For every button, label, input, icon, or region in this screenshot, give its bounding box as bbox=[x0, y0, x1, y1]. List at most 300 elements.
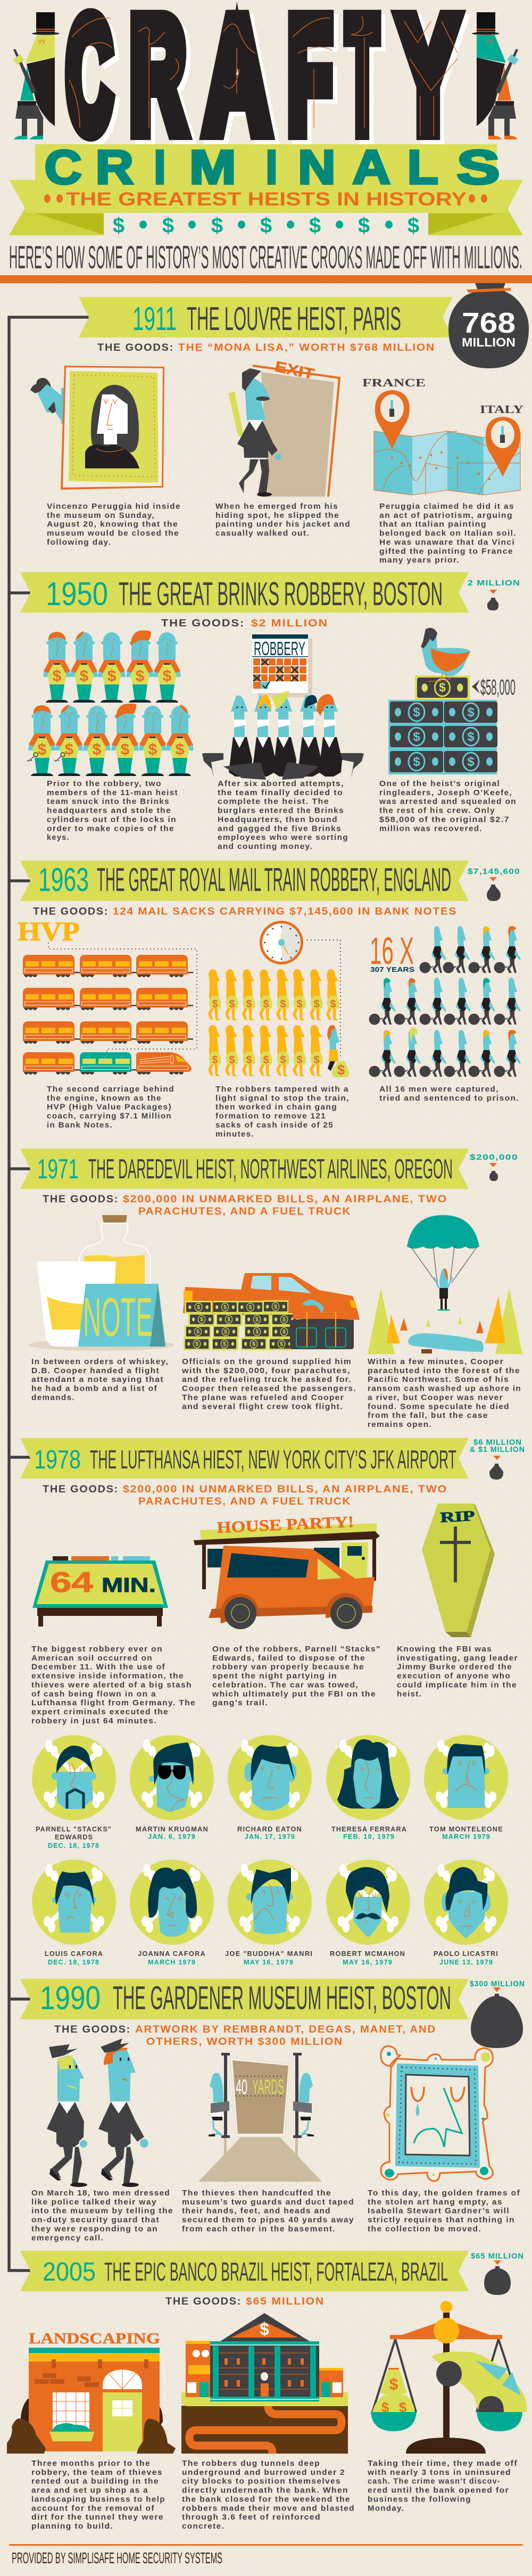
figures: chain gang: $ bbox=[337, 1062, 345, 1078]
portrait: Krugman: MARTIN KRUGMAN bbox=[136, 1825, 209, 1833]
ribbon heading bbox=[20, 572, 469, 613]
portrait: Manri: JOE "BUDDHA" MANRI bbox=[225, 1950, 313, 1958]
text block: col 3: execution of anyone who bbox=[397, 1672, 511, 1681]
text block: col 2: from each other in the basement. bbox=[182, 2224, 336, 2233]
dollar row: $ bbox=[162, 214, 174, 237]
heading: CRIMINALS: R bbox=[96, 141, 134, 194]
icon: exit door with thief: EXIT bbox=[273, 358, 316, 382]
icon: van at house party: HOUSE PARTY! bbox=[217, 1513, 354, 1537]
label: 64 MIN.: 64 bbox=[50, 1566, 93, 1598]
text block: col 1: account for the removal of bbox=[31, 2504, 155, 2513]
panel: 1950 Brinks bbox=[20, 572, 520, 780]
text block: col 3: To this day, the golden frames of bbox=[368, 2189, 520, 2198]
amount marker bbox=[468, 868, 520, 901]
text block: col 3 bbox=[397, 1645, 518, 1698]
amount marker bbox=[470, 1980, 525, 2048]
ribbon heading: 1963 bbox=[38, 862, 89, 898]
text block: col 2: minutes. bbox=[215, 1129, 254, 1138]
text block: col 3: Within a few minutes, Cooper bbox=[368, 1357, 504, 1366]
text block: col 3 bbox=[368, 2189, 520, 2233]
text block: col 1: order to make copies of the bbox=[47, 824, 174, 833]
label: landscaping: LANDSCAPING bbox=[29, 2330, 160, 2347]
dollar row: $ bbox=[309, 214, 321, 237]
text block: col 2 bbox=[218, 779, 348, 851]
text block: col 2: hiding spot, he slipped the bbox=[215, 511, 339, 520]
portrait: J. Cafora bbox=[130, 1860, 214, 1966]
text block: col 3 bbox=[379, 502, 517, 565]
text block: col 1: like police talked their way bbox=[31, 2198, 157, 2207]
the goods: $200,000 IN UNMARKED BILLS, AN AIRPLANE, TWO bbox=[123, 1484, 447, 1495]
text block: col 1: they were responding to an bbox=[31, 2224, 158, 2233]
label: 64 MIN.: MIN. bbox=[102, 1574, 156, 1597]
the goods: THE GOODS: bbox=[165, 2296, 242, 2307]
footer bbox=[9, 2544, 522, 2567]
text block: col 2: The thieves then handcuffed the bbox=[182, 2189, 331, 2198]
text block: col 1 bbox=[47, 502, 181, 547]
text block: col 1 bbox=[31, 1645, 196, 1725]
icon: parachute over forest bbox=[368, 1215, 522, 1354]
text block: col 2: and several flight crew took flight. bbox=[182, 1402, 343, 1411]
portrait: L. Cafora bbox=[32, 1860, 116, 1966]
title: CRAFTY bbox=[66, 0, 462, 169]
text block: col 3: remains open. bbox=[368, 1420, 432, 1429]
text block: col 2: Edwards, failed to dispose of the bbox=[212, 1654, 365, 1663]
text block: col 1 bbox=[47, 779, 178, 842]
portrait: Edwards: DEC. 18, 1978 bbox=[48, 1842, 99, 1850]
label: France: FRANCE bbox=[362, 376, 426, 389]
label: 16X 307 years bbox=[370, 930, 414, 973]
the goods: $2 MILLION bbox=[251, 618, 328, 629]
text block: col 1: following day. bbox=[47, 538, 111, 547]
text block: col 1 bbox=[47, 1085, 174, 1129]
text block: col 2: which ultimately put the FBI on the bbox=[212, 1689, 376, 1698]
icon: mona lisa painting bbox=[61, 366, 164, 490]
icon: whiskey and note bbox=[29, 1215, 174, 1351]
label: 40 yards: 40 bbox=[236, 2076, 247, 2099]
portrait: Ferrara: FEB. 10, 1979 bbox=[343, 1832, 395, 1840]
panel: 1963 Royal Mail bbox=[18, 861, 521, 1078]
amount marker bbox=[470, 1438, 525, 1480]
icon: coffin RIP: RIP bbox=[440, 1508, 475, 1525]
text block: col 3: parachuted into the forest of the bbox=[368, 1366, 520, 1375]
pin: Italy bbox=[486, 417, 520, 477]
text block: col 1: landscaping business to help bbox=[31, 2495, 165, 2504]
teal HVP coach bbox=[80, 1052, 137, 1075]
text block: col 1: American soil occurred on bbox=[31, 1654, 153, 1663]
text block: col 3: a river, but Cooper was never bbox=[368, 1393, 503, 1402]
text block: col 1: the museum on Sunday, bbox=[47, 511, 155, 520]
amount marker bbox=[468, 579, 520, 610]
the goods: $200,000 IN UNMARKED BILLS, AN AIRPLANE, TWO bbox=[123, 1194, 447, 1205]
text block: col 2 bbox=[182, 2189, 354, 2233]
text block: col 1: coach, carrying $7.1 Million bbox=[47, 1112, 172, 1121]
text block: col 2: robbery van properly because he bbox=[212, 1663, 364, 1672]
text block: col 2: then worked in chain gang bbox=[215, 1103, 337, 1112]
ribbon heading: 1990 bbox=[40, 1980, 101, 2017]
text block: col 3: Isabella Stewart Gardner’s will bbox=[368, 2207, 510, 2216]
text block: col 1: museum would be closed the bbox=[47, 529, 179, 538]
text block: col 1: cylinders out of the locks in bbox=[47, 815, 177, 824]
portrait: J. Cafora: JOANNA CAFORA bbox=[138, 1950, 206, 1958]
text block: col 1: In between orders of whiskey, bbox=[31, 1357, 169, 1366]
text block: col 3: Jimmy Burke ordered the bbox=[397, 1663, 512, 1672]
dotted connector: HVP bbox=[48, 943, 197, 1052]
portrait: Edwards bbox=[32, 1735, 116, 1850]
text block: col 1: the engine, known as the bbox=[47, 1094, 162, 1103]
heading: CRIMINALS: I bbox=[265, 141, 278, 194]
label: Italy: ITALY bbox=[480, 403, 523, 416]
label: $58,000 bbox=[472, 675, 516, 699]
text block: col 2: concrete. bbox=[182, 2522, 225, 2531]
text block: col 3: many years prior. bbox=[379, 556, 460, 565]
text block: col 3 bbox=[367, 2459, 518, 2513]
the goods: THE GOODS: bbox=[161, 618, 245, 629]
label: 40 yards bbox=[236, 2076, 284, 2099]
the goods bbox=[161, 618, 328, 629]
panel: 2005 Banco Brazil bbox=[7, 2251, 527, 2454]
text block: col 2: casually walked out. bbox=[215, 529, 310, 538]
portrait: Licastri: JUNE 13, 1979 bbox=[439, 1958, 493, 1966]
text block: col 3: heist. bbox=[397, 1689, 422, 1698]
text block: col 3: investigating, gang leader bbox=[397, 1654, 518, 1663]
ribbon heading: 1978 bbox=[34, 1446, 81, 1474]
portrait: Monteleone: TOM MONTELEONE bbox=[429, 1825, 503, 1833]
text block: col 3: Taking their time, they made off bbox=[368, 2459, 518, 2468]
text block: col 2: the bank closed for the weekend the bbox=[182, 2495, 351, 2504]
text block: col 2: employees who were sorting bbox=[218, 833, 348, 842]
header bbox=[0, 0, 532, 283]
text block: col 3: $58,000 of the original $2.7 bbox=[379, 815, 510, 824]
text block: col 2: complete the heist. The bbox=[218, 797, 329, 806]
text block: col 1: dirt for the tunnel they were bbox=[31, 2513, 164, 2522]
text block: col 3: cash. The crime wasn’t discov- bbox=[368, 2477, 501, 2486]
portrait: Monteleone bbox=[424, 1735, 508, 1840]
text block: col 1: extensive inside information, the bbox=[31, 1672, 184, 1681]
text block: col 3: the rest of his crew. Only bbox=[379, 806, 495, 815]
text block: col 2: and gagged the five Brinks bbox=[218, 824, 342, 833]
amount marker bbox=[471, 2252, 524, 2295]
the goods bbox=[43, 1484, 447, 1507]
portrait: McMahon: ROBERT MCMAHON bbox=[330, 1950, 405, 1958]
heading: CRIMINALS: N bbox=[298, 141, 336, 194]
text block: col 1: headquarters and stole the bbox=[47, 806, 171, 815]
text block: col 1: The biggest robbery ever on bbox=[31, 1645, 163, 1654]
portrait: L. Cafora: DEC. 18, 1978 bbox=[48, 1958, 99, 1966]
text block: col 3: strictly requires that nothing in bbox=[368, 2216, 515, 2225]
icon: robbery calendar: ROBBERY bbox=[254, 638, 305, 659]
ribbon heading bbox=[20, 2251, 469, 2291]
label: 64 MIN. bbox=[50, 1566, 156, 1598]
text block: col 2: museum’s two guards and duct taped bbox=[182, 2198, 354, 2207]
the goods: THE GOODS: bbox=[54, 2024, 131, 2035]
text block: col 3: Pacific Northwest. Some of his bbox=[368, 1375, 509, 1384]
the goods: THE GOODS: bbox=[97, 342, 174, 353]
timeline bbox=[9, 317, 89, 2270]
heading: CRIMINALS: I bbox=[154, 141, 166, 194]
text block: col 3: Peruggia claimed he did it as bbox=[379, 502, 514, 511]
character: left crook bbox=[13, 12, 60, 139]
text block: col 1: December 11. With the use of bbox=[31, 1663, 165, 1672]
text block: col 1: robbery in just 64 minutes. bbox=[31, 1716, 157, 1725]
text block: col 2: robbers made their move and blasted bbox=[182, 2504, 355, 2513]
dollar row: $ bbox=[358, 214, 370, 237]
text block: col 3: Monday. bbox=[368, 2504, 404, 2513]
text block: col 2 bbox=[215, 502, 351, 538]
portrait: Monteleone: MARCH 1979 bbox=[442, 1832, 491, 1840]
money bag: 768 million bbox=[448, 283, 529, 368]
portrait: J. Cafora: MARCH 1979 bbox=[148, 1958, 196, 1966]
ribbon heading: 1950 bbox=[46, 576, 108, 613]
text block: col 1: area and set up shop as a bbox=[31, 2486, 148, 2495]
money bag: 768 million: MILLION bbox=[462, 335, 516, 349]
the goods: THE GOODS: bbox=[33, 906, 109, 918]
portrait: Eaton: RICHARD EATON bbox=[237, 1825, 302, 1833]
amount marker: $300 MILLION bbox=[470, 1980, 525, 1988]
icon: empty frame bbox=[381, 2046, 493, 2181]
icon: 64 minute table bbox=[32, 1556, 168, 1626]
portrait: Ferrara: THERESA FERRARA bbox=[331, 1825, 407, 1833]
money bag: 768 million: 768 bbox=[462, 307, 516, 339]
text block: col 2: directly underneath the bank. When bbox=[182, 2486, 348, 2495]
ribbon heading bbox=[20, 861, 469, 901]
amount marker: 2 MILLION bbox=[468, 579, 520, 588]
text block: col 2: the team finally decided to bbox=[218, 788, 343, 797]
text block: col 1: On March 18, two men dressed bbox=[31, 2189, 170, 2198]
icon: bound guards and 40 yards bbox=[198, 2053, 322, 2182]
text block: col 1: Three months prior to the bbox=[31, 2459, 151, 2468]
the goods: 124 MAIL SACKS CARRYING $7,145,600 IN BANK NOTES bbox=[113, 906, 457, 918]
text block: col 3: business the following bbox=[368, 2495, 471, 2504]
text block: col 2: and counting money. bbox=[218, 842, 313, 851]
icon: clock bbox=[260, 921, 303, 964]
text block: col 2: Cooper then released the passengers. bbox=[182, 1384, 356, 1393]
text block: col 2 bbox=[212, 1645, 381, 1707]
icon: scales with cash and car: $ bbox=[389, 2376, 398, 2393]
label: 16X 307 years: 16 X bbox=[370, 930, 414, 972]
the goods: ARTWORK BY REMBRANDT, DEGAS, MANET, AND bbox=[135, 2024, 436, 2035]
text block: col 3 bbox=[379, 779, 517, 833]
text block: col 1: robbery, the team of thieves bbox=[31, 2468, 163, 2477]
the goods: THE “MONA LISA,” WORTH $768 MILLION bbox=[178, 342, 435, 353]
amount marker: & $1 MILLION bbox=[470, 1446, 525, 1454]
text block: col 3: gifted the painting to France bbox=[379, 547, 513, 556]
icon: coffin RIP bbox=[422, 1504, 495, 1637]
label: 16X 307 years: 307 YEARS bbox=[370, 966, 414, 973]
portrait: Ferrara bbox=[326, 1735, 410, 1840]
heading: CRIMINALS: M bbox=[189, 141, 236, 194]
text block: col 2: spent the night partying in bbox=[212, 1672, 337, 1681]
portrait: Licastri: PAOLO LICASTRI bbox=[434, 1950, 498, 1958]
text block: col 2: painting under his jacket and bbox=[215, 520, 351, 529]
dollar row bbox=[113, 214, 419, 237]
text block: col 3: that an Italian painting bbox=[379, 520, 487, 529]
the goods bbox=[97, 342, 435, 353]
text block: col 3: the collection be moved. bbox=[368, 2224, 481, 2233]
portrait: Krugman: JAN. 6, 1979 bbox=[148, 1832, 196, 1840]
text block: col 1: team snuck into the Brinks bbox=[47, 797, 170, 806]
dotted connector: clock bbox=[307, 940, 340, 1056]
pin: France bbox=[375, 390, 410, 449]
the goods: OTHERS, WORTH $300 MILLION bbox=[146, 2036, 343, 2047]
text block: col 1: demands. bbox=[31, 1393, 75, 1402]
portrait: Licastri bbox=[424, 1860, 508, 1966]
ribbon heading: 1971 bbox=[37, 1154, 79, 1185]
text block: col 1: The second carriage behind bbox=[47, 1085, 174, 1094]
amount marker bbox=[470, 1153, 518, 1181]
icon: whiskey and note: NOTE bbox=[83, 1286, 153, 1348]
panel: 1971 Daredevil bbox=[20, 1149, 522, 1354]
text block: col 2: with the $200,000, four parachutes, bbox=[181, 1366, 351, 1375]
portrait: McMahon: MAY 16, 1979 bbox=[343, 1958, 393, 1966]
portrait: Krugman bbox=[130, 1735, 214, 1840]
icon: stork on money bbox=[388, 628, 516, 774]
text block: col 1: August 20, knowing that the bbox=[47, 520, 178, 529]
text block: col 1: he had a bomb and a list of bbox=[31, 1384, 157, 1393]
text block: col 1: attendant a note saying that bbox=[31, 1375, 164, 1384]
dollar row: $ bbox=[113, 214, 124, 237]
icon: truck, cash and parachute bags bbox=[183, 1273, 360, 1350]
the goods bbox=[165, 2296, 325, 2307]
icon: scales with cash and car: $ bbox=[399, 2399, 407, 2415]
figures: sixteen convicts bbox=[369, 926, 521, 1077]
text block: col 1: keys. bbox=[47, 833, 70, 842]
text block: col 2: secured them to pipes 40 yards away bbox=[182, 2216, 354, 2225]
heading: CRIMINALS: C bbox=[45, 140, 82, 194]
figures: fake policemen bbox=[47, 2038, 148, 2187]
the goods bbox=[43, 1194, 447, 1217]
text block: col 3: an act of patriotism, arguing bbox=[379, 511, 513, 520]
icon: bank and tunnel: $ bbox=[260, 2319, 269, 2339]
icon: robbery calendar bbox=[252, 634, 312, 697]
text block: col 2 bbox=[182, 2459, 355, 2531]
icon: scales with cash and car bbox=[371, 2301, 527, 2454]
portrait: L. Cafora: LOUIS CAFORA bbox=[45, 1950, 103, 1958]
dollar row: $ bbox=[211, 214, 223, 237]
the goods: $65 MILLION bbox=[246, 2296, 325, 2307]
text block: col 1: into the museum by telling the bbox=[31, 2207, 173, 2216]
subheading: THE GREATEST HEISTS IN HISTORY bbox=[66, 189, 467, 210]
icon: bank and tunnel bbox=[181, 2313, 348, 2454]
text block: col 2: Officials on the ground supplied him bbox=[182, 1357, 352, 1366]
text block: col 2: through 3.6 feet of reinforced bbox=[182, 2513, 321, 2522]
ribbon heading: 1911 bbox=[132, 301, 177, 337]
figures: chain gang bbox=[208, 969, 350, 1078]
text block: col 2: After six aborted attempts, bbox=[218, 779, 344, 788]
text block: col 2: light signal to stop the train, bbox=[215, 1094, 350, 1103]
character: right crook bbox=[472, 12, 519, 139]
text block: col 2: celebration. The car was towed, bbox=[212, 1680, 359, 1689]
text block: col 3: could implicate him in the bbox=[397, 1680, 517, 1689]
text block: col 2: Headquarters, then bound bbox=[218, 815, 338, 824]
text block: col 3: He was unaware that da Vinci bbox=[379, 538, 515, 547]
text block: col 1: members of the 11-man heist bbox=[47, 788, 178, 797]
icon: exit door with thief bbox=[228, 358, 339, 497]
icon: peeking thief bbox=[30, 378, 64, 424]
text block: col 3: the stolen art hang empty, as bbox=[368, 2198, 503, 2207]
text block: col 1: thieves were alerted of a big stash bbox=[31, 1680, 192, 1689]
heading: CRIMINALS: L bbox=[408, 141, 438, 194]
policeman 1 bbox=[47, 2044, 87, 2187]
text block: col 1: HVP (High Value Packages) bbox=[47, 1103, 172, 1112]
the goods: PARACHUTES, AND A FUEL TRUCK bbox=[138, 1496, 351, 1507]
heading: CRIMINALS bbox=[45, 140, 500, 194]
icon: scales with cash and car: $ bbox=[381, 2399, 389, 2415]
text block: col 3: with nearly 3 tons in uninsured bbox=[367, 2468, 511, 2477]
text block: col 3 bbox=[368, 1357, 521, 1429]
portrait: Edwards: EDWARDS bbox=[55, 1833, 93, 1841]
text block: col 1: Lufthansa flight from Germany. The bbox=[31, 1698, 196, 1707]
icon: map France to Italy bbox=[362, 376, 523, 495]
text block: col 2: sacks of cash inside of 25 bbox=[215, 1120, 334, 1129]
portrait grid: gang members bbox=[32, 1735, 508, 1966]
ribbon heading bbox=[79, 297, 453, 337]
portrait: Manri: MAY 16, 1979 bbox=[244, 1958, 294, 1966]
portrait: Eaton bbox=[228, 1735, 312, 1840]
text block: col 1 bbox=[31, 2459, 165, 2531]
heading: CRIMINALS: S bbox=[456, 141, 500, 194]
banner: criminals ribbon bbox=[9, 140, 523, 235]
text block: col 1: Vincenzo Peruggia hid inside bbox=[47, 502, 181, 511]
text block: col 1: planning to build. bbox=[31, 2522, 113, 2531]
text block: col 2: formation to remove 121 bbox=[215, 1112, 326, 1121]
text block: col 1: in Bank Notes. bbox=[47, 1120, 113, 1129]
text block: col 3: ered until the bank opened for bbox=[368, 2486, 509, 2495]
text block: col 2 bbox=[215, 1085, 350, 1138]
text block: col 3: ringleaders, Joseph O’Keefe, bbox=[379, 788, 512, 797]
icon: van at house party bbox=[194, 1513, 380, 1629]
text block: col 3: tried and sentenced to prison. bbox=[379, 1094, 519, 1103]
orange divider bbox=[0, 275, 532, 283]
icon: landscaping storefront bbox=[7, 2330, 176, 2454]
text block: col 2 bbox=[181, 1357, 356, 1411]
chart: train bbox=[23, 955, 193, 1075]
the goods bbox=[54, 2024, 436, 2047]
portrait: McMahon bbox=[326, 1860, 410, 1966]
text block: col 2: gang’s trail. bbox=[212, 1698, 268, 1707]
portrait: Eaton: JAN. 17, 1979 bbox=[245, 1832, 295, 1840]
figures: bound employees bbox=[202, 691, 364, 780]
text block: col 2: and the refueling truck he asked for. bbox=[182, 1375, 352, 1384]
text block: col 3: All 16 men were captured, bbox=[379, 1085, 499, 1094]
text block: col 1 bbox=[31, 1357, 169, 1402]
text block: col 3: ransom cash washed up ashore in bbox=[368, 1384, 521, 1393]
text block: col 2: When he emerged from his bbox=[215, 502, 338, 511]
text block: col 3: Knowing the FBI was bbox=[397, 1645, 492, 1654]
amount marker: $200,000 bbox=[470, 1153, 518, 1162]
text block: col 2: The plane was refueled and Cooper bbox=[182, 1393, 344, 1402]
text block: col 1: of cash being flown in on a bbox=[31, 1689, 156, 1698]
text block: col 1: emergency call. bbox=[31, 2233, 104, 2242]
text block: col 3: belonged back on Italian soil. bbox=[379, 529, 517, 538]
text block: col 2: The robbers tampered with a bbox=[215, 1085, 349, 1094]
ribbon heading bbox=[20, 1979, 469, 2019]
policeman 2 bbox=[98, 2038, 148, 2187]
text block: col 3: One of the heist’s original bbox=[379, 779, 500, 788]
ribbon heading bbox=[20, 1438, 469, 1479]
panel: 1990 Gardner bbox=[20, 1979, 525, 2187]
panel: 1978 Lufthansa bbox=[20, 1438, 525, 1637]
figures: eleven men bbox=[27, 630, 194, 776]
text block: col 1: D.B. Cooper handed a flight bbox=[31, 1366, 160, 1375]
text block: col 3: was arrested and squealed on bbox=[379, 797, 517, 806]
text block: col 3: million was recovered. bbox=[379, 824, 483, 833]
footer: PROVIDED BY SIMPLISAFE HOME SECURITY SYSTEMS bbox=[12, 2550, 222, 2567]
portrait: Manri bbox=[225, 1860, 313, 1966]
text block: col 1: expert criminals executed the bbox=[31, 1707, 169, 1716]
portrait: Edwards: PARNELL "STACKS" bbox=[36, 1825, 112, 1833]
amount marker: $65 MILLION bbox=[471, 2252, 524, 2261]
locomotive bbox=[136, 1052, 192, 1075]
